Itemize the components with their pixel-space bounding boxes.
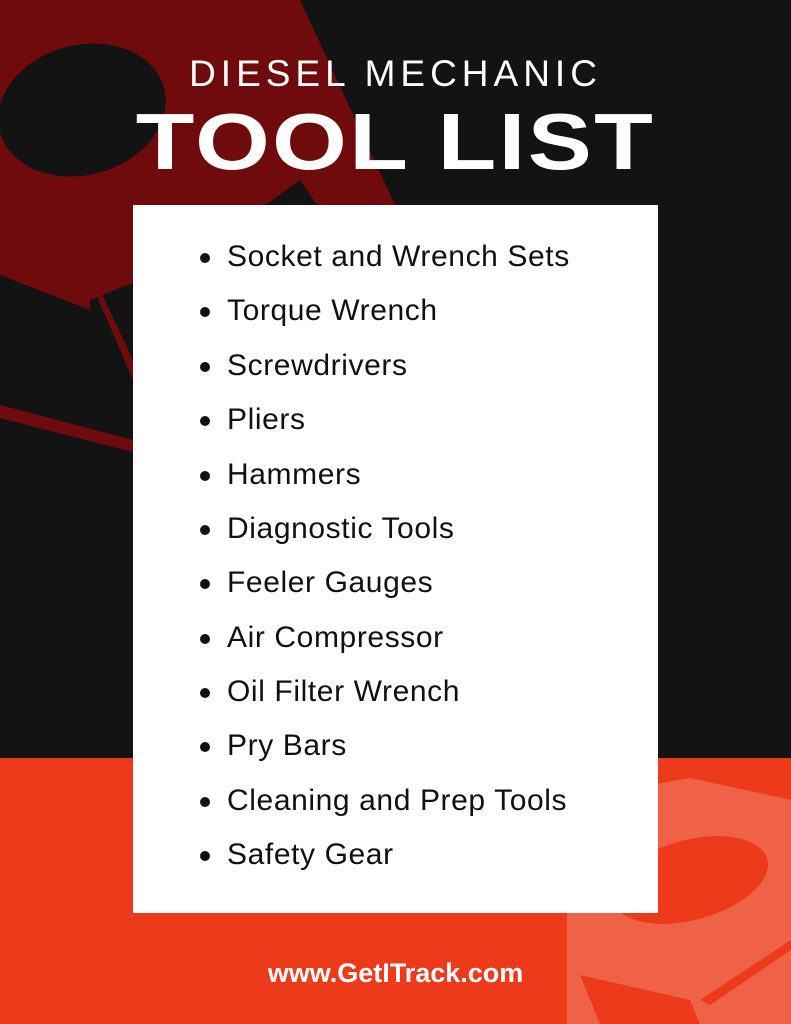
panel: tool list card: Hammers (227, 458, 361, 491)
title: tool list: TOOL LIST (136, 97, 655, 186)
panel: tool list card: Screwdrivers (227, 349, 408, 382)
panel: tool list card: Oil Filter Wrench (227, 675, 460, 708)
panel: tool list card (133, 205, 658, 913)
panel: tool list card: Cleaning and Prep Tools (227, 784, 567, 817)
panel: tool list card: Pliers (227, 403, 306, 436)
footer url: www.GetITrack.com (268, 958, 523, 988)
panel: tool list card: Pry Bars (227, 729, 347, 762)
panel: tool list card: Safety Gear (227, 838, 394, 871)
heading: diesel mechanic: DIESEL MECHANIC (189, 53, 602, 94)
panel: tool list card: Feeler Gauges (227, 566, 433, 599)
panel: tool list card: Socket and Wrench Sets (227, 240, 570, 273)
panel: tool list card: Air Compressor (227, 621, 444, 654)
panel: tool list card: Torque Wrench (227, 294, 438, 327)
panel: tool list card: Diagnostic Tools (227, 512, 454, 545)
